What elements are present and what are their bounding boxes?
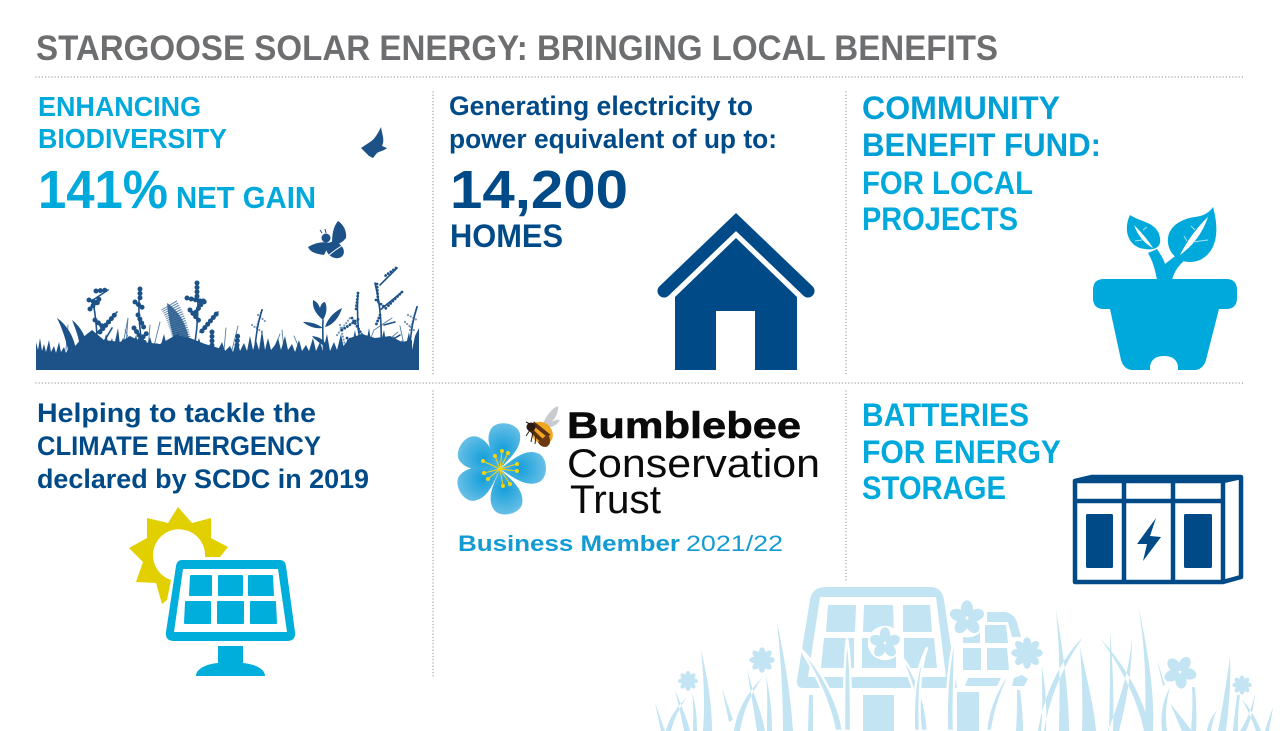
panel: enhancing biodiversity xyxy=(36,91,419,370)
panel: community benefit fund xyxy=(862,90,1237,370)
icon: bumblebee xyxy=(526,406,560,449)
statistic: 141% net gain xyxy=(38,160,316,220)
text: climate emergency statement: Helping to tackle the xyxy=(37,398,316,428)
panel: homes powered xyxy=(449,91,808,370)
text: climate emergency statement: declared by SCDC in 2019 xyxy=(37,464,369,494)
statistic: 141% net gain: NET GAIN xyxy=(176,180,316,215)
heading: batteries for energy storage xyxy=(862,397,1061,506)
icon: butterfly xyxy=(361,127,387,158)
panel: bumblebee conservation trust logo xyxy=(452,405,820,556)
heading: community benefit fund: COMMUNITY xyxy=(862,90,1060,126)
heading: batteries for energy storage: FOR ENERGY xyxy=(862,434,1061,470)
heading: batteries for energy storage: BATTERIES xyxy=(862,397,1029,433)
heading: enhancing biodiversity xyxy=(38,91,227,154)
icon: sun and solar panel xyxy=(129,507,295,676)
text: generating electricity: Generating electricity to xyxy=(449,91,753,121)
statistic: 141% net gain: 141% xyxy=(38,160,168,220)
text: for local projects xyxy=(862,165,1033,237)
text: generating electricity: power equivalent of up to: xyxy=(449,124,777,154)
heading: enhancing biodiversity: BIODIVERSITY xyxy=(38,123,227,154)
panel: batteries xyxy=(862,397,1241,582)
text: business member 2021/22 xyxy=(458,531,783,556)
background illustration: pale solar panels, flowers and grass xyxy=(655,587,1273,731)
statistic: 14,200 homes xyxy=(450,160,628,254)
heading: community benefit fund: BENEFIT FUND: xyxy=(862,127,1101,163)
statistic: 14,200 homes: HOMES xyxy=(450,218,563,254)
sub-element: solid mass at the foot of the plants xyxy=(70,330,412,356)
wordmark: bumblebee conservation trust: Trust xyxy=(570,478,661,522)
text: generating electricity xyxy=(449,91,777,154)
dotted grid dividers xyxy=(36,77,1244,677)
heading: community benefit fund xyxy=(862,90,1101,163)
heading: batteries for energy storage: STORAGE xyxy=(862,470,1006,506)
text: for local projects: FOR LOCAL xyxy=(862,165,1033,201)
icon: battery storage unit xyxy=(1075,477,1241,582)
text: for local projects: PROJECTS xyxy=(862,201,1018,237)
heading: enhancing biodiversity: ENHANCING xyxy=(38,91,201,122)
wordmark: bumblebee conservation trust: Bumblebee xyxy=(567,405,801,446)
title: STARGOOSE SOLAR ENERGY: BRINGING LOCAL BENEFITS xyxy=(36,28,998,68)
icon: plant pot xyxy=(1093,207,1237,370)
text: business member 2021/22: Business Member xyxy=(458,531,681,556)
icon: blue flower xyxy=(452,421,547,517)
wordmark: bumblebee conservation trust xyxy=(567,405,820,522)
statistic: 14,200 homes: 14,200 xyxy=(450,160,628,220)
panel: climate emergency xyxy=(37,398,369,676)
text: climate emergency statement: CLIMATE EMERGENCY xyxy=(37,431,321,461)
illustration: meadow grass silhouette xyxy=(36,268,419,370)
text: climate emergency statement xyxy=(37,398,369,494)
text: business member 2021/22: 2021/22 xyxy=(686,531,783,556)
icon: bee silhouette xyxy=(308,221,347,262)
wordmark: bumblebee conservation trust: Conservation xyxy=(567,442,820,486)
icon: house xyxy=(664,222,808,370)
